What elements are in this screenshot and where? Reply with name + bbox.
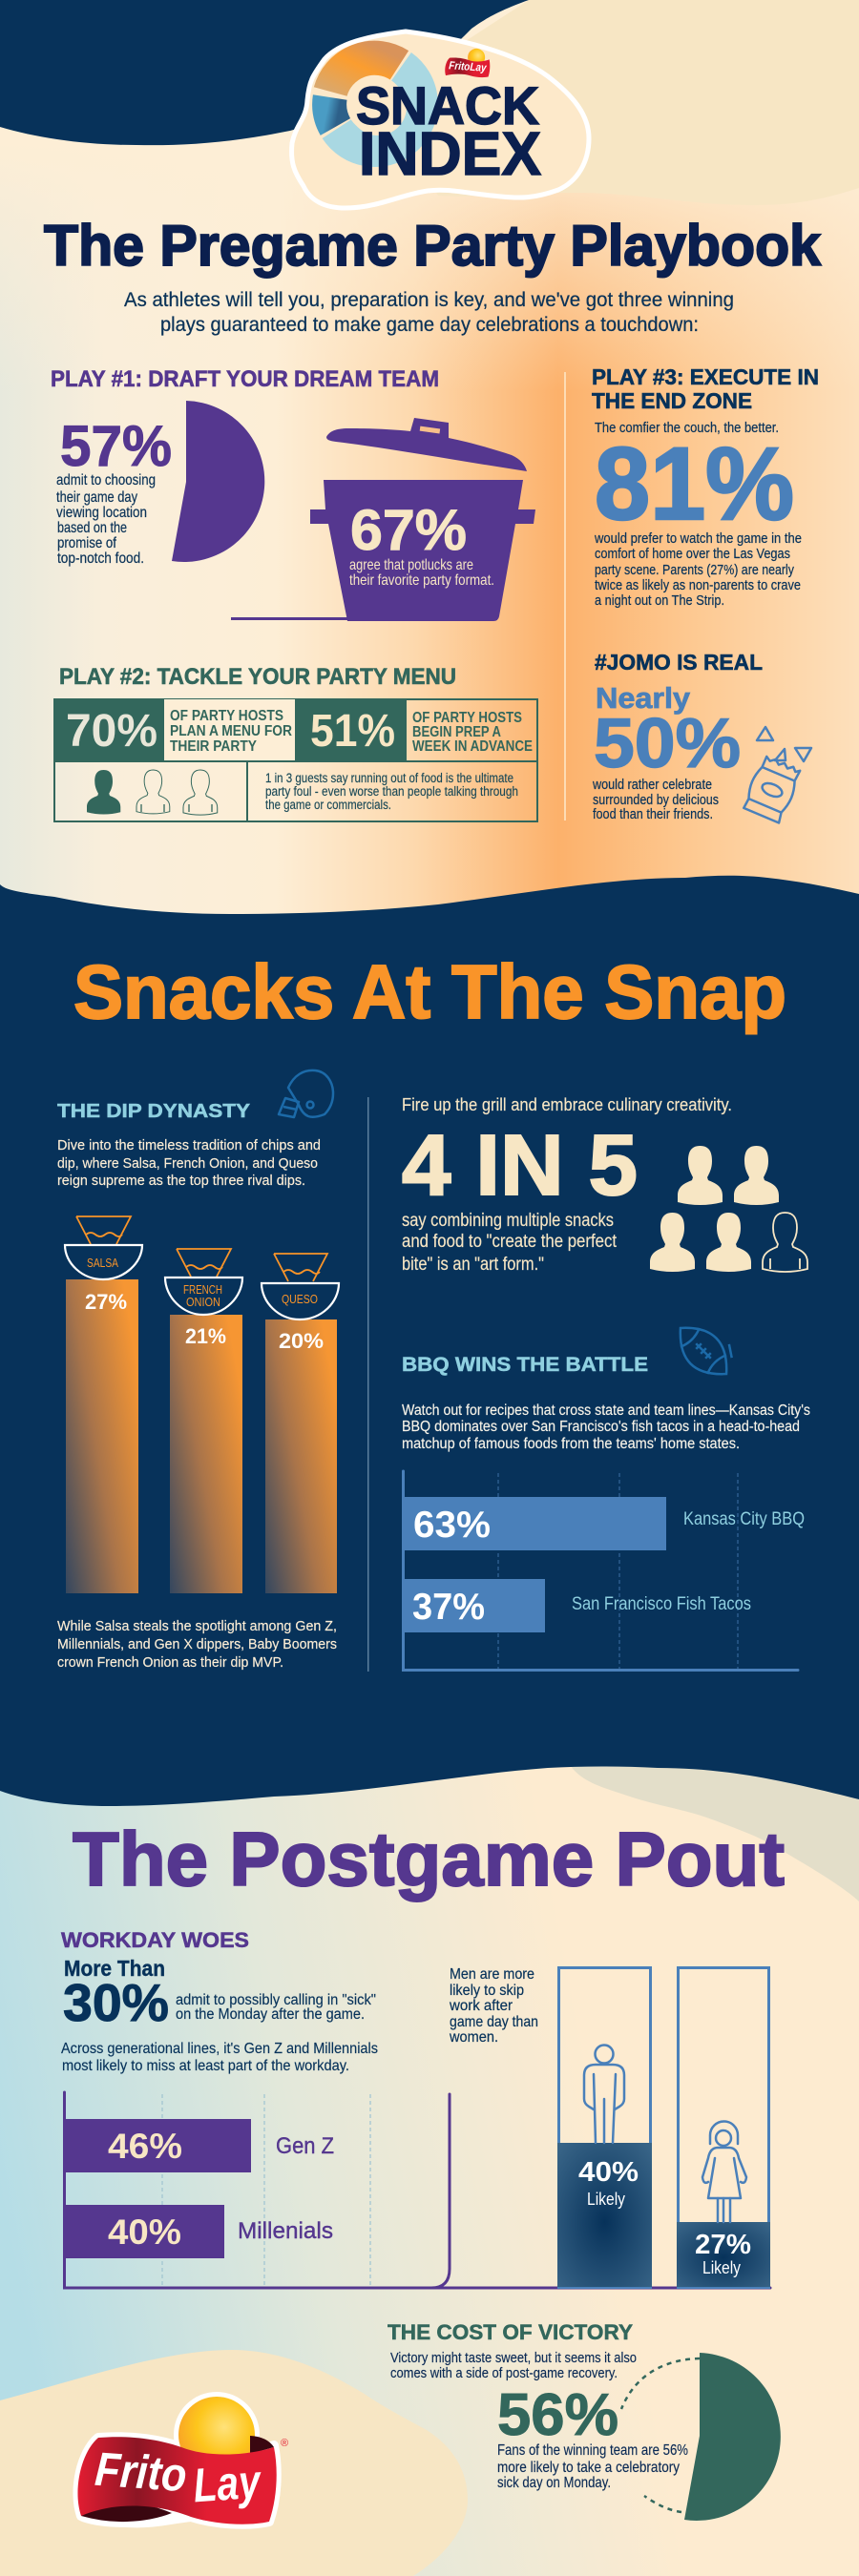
pie chart: 57 percent [172,401,264,562]
bar: san francisco fish tacos [405,1579,751,1632]
section background: postgame [0,1765,859,2576]
bar: queso: 20% [279,1329,324,1353]
text: men more likely: work after [449,1998,513,2014]
bar: french onion [165,1249,242,1593]
icon: man [584,2046,624,2143]
text: perfect bite [402,1211,618,1275]
heading: play 1: PLAY #1: DRAFT YOUR DREAM TEAM [51,366,439,392]
logo: frito lay: ® [281,2438,288,2449]
heading: the cost of victory: THE COST OF VICTORY [388,2320,633,2344]
text: party foul [265,771,518,812]
text: recipes: Watch out for recipes that cross state and team lines—Kansas City's [402,1402,810,1419]
icon: woman [702,2122,746,2222]
bar: salsa: SALSA [87,1256,118,1270]
stat: 57 percent: based on the [57,520,127,536]
label: begin prep [412,710,533,755]
heading: jomo: #JOMO IS REAL [595,650,763,675]
title: the pregame party playbook: The Pregame Party Playbook [44,214,822,278]
section background: snacks at the snap navy band [0,876,859,1806]
text: stay home: a night out on The Strip. [595,592,724,609]
text: men more likely: Men are more [450,1966,534,1983]
logo text: Lay [192,2455,263,2512]
text: dip intro [57,1137,321,1189]
text: celebrate with food: would rather celebrate [592,777,712,793]
chart: women 27 percent: Likely [702,2258,741,2277]
bar: queso: QUESO [282,1292,318,1306]
text: victory: comes with a side of post-game recovery. [390,2365,618,2381]
stat: 51 percent: 51% [310,706,395,757]
text: dip mvp: crown French Onion as their dip MVP. [57,1654,283,1671]
stat: 4 in 5: 4 IN 5 [402,1118,638,1214]
bar: kansas city bbq [405,1497,805,1550]
icon: three guests [87,770,218,815]
text: recipes: BBQ dominates over San Francisco's fish tacos in a head-to-head [402,1419,800,1435]
text: sick day: more likely to take a celebratory [497,2460,680,2476]
potluck text: their favorite party format. [349,572,494,589]
text: party foul: party foul - even worse than people talking through [265,784,518,799]
chart: men 40 percent: Likely [587,2190,625,2209]
label: plan a menu [170,708,292,755]
text: stay home: party scene. Parents (27%) are nearly [595,562,794,578]
small frito lay logo: FritoLay [449,59,488,74]
bar: gen z [65,2119,334,2172]
heading: workday woes: WORKDAY WOES [61,1928,249,1952]
table: party menu stats [53,698,537,821]
text: dip mvp: Millennials, and Gen X dippers, Baby Boomers [57,1636,337,1652]
text: stay home: comfort of home over the Las Vegas [595,546,790,562]
chart: men 40 percent [557,1967,652,2288]
stat: 70 percent: 70% [66,706,157,757]
text: sick day: sick day on Monday. [497,2475,611,2491]
text: stay home [594,530,802,609]
chart: men 40 percent: 40% [578,2157,639,2188]
intro text: plays guaranteed to make game day celebrations a touchdown: [160,314,699,336]
intro text [124,289,734,336]
heading: the dip dynasty: THE DIP DYNASTY [57,1101,251,1122]
bar chart: rival dips [65,1216,339,1593]
text: stay home: would prefer to watch the game in the [594,530,802,547]
bar chart: bbq vs fish tacos [403,1471,805,1670]
logo text: Frito [94,2442,188,2502]
text: celebrate with food: food than their friends. [593,806,713,822]
text: stay home: twice as likely as non-parents to crave [595,577,801,593]
stat: 81 percent: 81% [595,426,794,541]
text: dip mvp: While Salsa steals the spotlight among Gen Z, [57,1618,337,1634]
title: the postgame pout: The Postgame Pout [73,1817,785,1901]
heading: bbq wins the battle: BBQ WINS THE BATTLE [402,1354,648,1376]
icon: football helmet [279,1070,333,1117]
heading: play 2: PLAY #2: TACKLE YOUR PARTY MENU [59,664,456,690]
text: victory: Victory might taste sweet, but it seems it also [390,2350,637,2366]
bar: millenials: 40% [108,2212,181,2252]
text: celebrate with food: surrounded by delicious [593,792,719,808]
icon: pot with lid [231,418,535,621]
text: fire up the grill: Fire up the grill and embrace culinary creativity. [402,1095,732,1114]
icon: chip bag [742,727,811,823]
stat: 56 percent: 56% [497,2382,618,2448]
text: perfect bite: bite" is an "art form." [402,1255,544,1275]
stat: more than 30 percent: More Than [64,1956,165,1981]
heading: play 3: THE END ZONE [592,388,752,413]
pie chart: 56 percent [621,2353,781,2521]
text: recipes [402,1402,810,1452]
bar: kansas city bbq: Kansas City BBQ [683,1509,805,1529]
text: men more likely: game day than [450,2014,538,2030]
label: plan a menu: THEIR PARTY [170,738,258,755]
logo text: snack: SNACK [356,75,539,135]
label: begin prep: WEEK IN ADVANCE [412,738,533,755]
bar: millenials: Millenials [238,2218,333,2244]
text: comfier couch: The comfier the couch, the better. [595,420,779,436]
intro text: As athletes will tell you, preparation is key, and we've got three winning [124,289,734,311]
text: generational lines: Across generational lines, it's Gen Z and Millennials [61,2041,378,2057]
icon: four of five people [650,1146,807,1272]
small frito lay logo [445,49,490,77]
stat: 57 percent: promise of [57,535,116,551]
label: begin prep: OF PARTY HOSTS [412,710,522,726]
text: victory [390,2350,637,2381]
text: calling in sick [176,1992,376,2023]
label: plan a menu: PLAN A MENU FOR [170,723,292,739]
stat: nearly 50 percent: Nearly [596,681,691,715]
label: plan a menu: OF PARTY HOSTS [170,708,283,724]
bar: french onion: ONION [186,1295,220,1309]
bar: gen z: Gen Z [276,2133,334,2159]
heading: play 3: PLAY #3: EXECUTE IN [592,364,819,389]
section background: pregame [0,0,859,954]
label: begin prep: BEGIN PREP A [412,724,501,740]
stat: 57 percent: viewing location [56,505,147,521]
text: men more likely: women. [449,2029,498,2046]
text: calling in sick: admit to possibly calling in "sick" [176,1992,376,2008]
text: men more likely: likely to skip [450,1983,524,1999]
bar: salsa [65,1216,142,1593]
stat: nearly 50 percent: 50% [594,705,741,782]
stat: 57 percent: top-notch food. [57,551,144,567]
bar: french onion: 21% [185,1324,226,1348]
logo text [94,2442,263,2512]
logo text: index: INDEX [359,119,541,188]
icon: football [668,1312,743,1386]
bar: queso [262,1254,339,1593]
bar: san francisco fish tacos: San Francisco Fish Tacos [572,1594,751,1614]
text: sick day [497,2442,688,2491]
text: calling in sick: on the Monday after the game. [176,2006,365,2023]
text: party foul: 1 in 3 guests say running out of food is the ultimate [265,771,513,785]
chart: women 27 percent [677,1967,770,2288]
bar: san francisco fish tacos: 37% [412,1587,485,1628]
potluck text: agree that potlucks are [349,557,473,573]
stat: 57 percent: admit to choosing [56,472,156,488]
text: dip intro: dip, where Salsa, French Onion, and Queso [57,1155,318,1172]
stat: 67 percent: 67% [350,498,467,562]
text: celebrate with food [592,777,719,822]
bar chart: generations [65,2092,770,2288]
stat: 57 percent: 57% [60,414,172,478]
bar: kansas city bbq: 63% [413,1505,491,1546]
bar: french onion: FRENCH [183,1282,222,1297]
text: party foul: the game or commercials. [265,798,391,812]
text: men more likely [449,1966,538,2046]
stat: 57 percent: their game day [56,489,137,506]
text: perfect bite: say combining multiple snacks [402,1211,614,1231]
text: generational lines: most likely to miss at least part of the workday. [62,2058,349,2074]
title: snacks at the snap: Snacks At The Snap [73,949,786,1034]
logo: snack index [292,31,589,208]
logo: frito lay [77,2392,288,2524]
bar: salsa: 27% [85,1290,127,1314]
text: recipes: matchup of famous foods from the teams' home states. [402,1436,740,1452]
bar: gen z: 46% [108,2127,182,2166]
heading: play 3 [592,364,819,413]
text: dip mvp [57,1618,337,1671]
stat: more than 30 percent: 30% [63,1973,169,2032]
text: dip intro: reign supreme as the top three rival dips. [57,1173,305,1189]
text: perfect bite: and food to "create the perfect [402,1232,618,1252]
text: generational lines [61,2041,378,2074]
potluck text [349,557,494,589]
text: sick day: Fans of the winning team are 56% [497,2442,688,2459]
text: dip intro: Dive into the timeless tradition of chips and [57,1137,321,1153]
bar: millenials [65,2205,333,2258]
chart: women 27 percent: 27% [695,2230,751,2260]
stat: 57 percent [56,414,172,567]
